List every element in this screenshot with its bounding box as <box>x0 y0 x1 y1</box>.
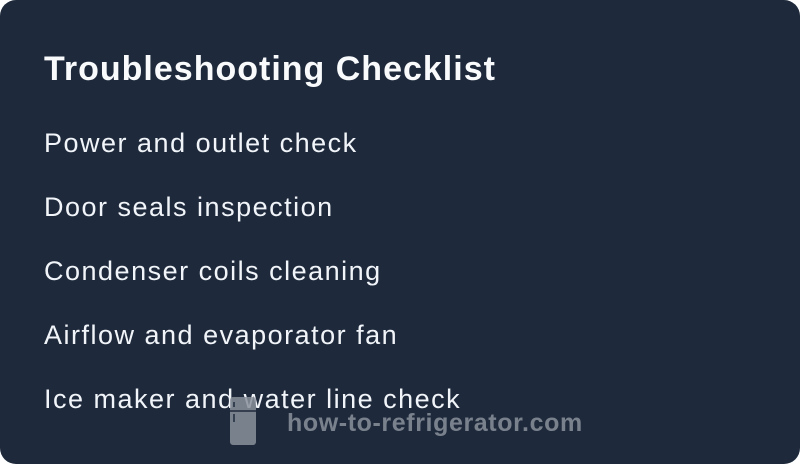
item: power: Power and outlet check <box>44 128 358 158</box>
item: condenser: Condenser coils cleaning <box>44 256 382 286</box>
title: Troubleshooting Checklist <box>44 50 496 88</box>
item: door seals: Door seals inspection <box>44 192 334 222</box>
item: ice maker: Ice maker and water line check <box>44 384 461 414</box>
item: airflow: Airflow and evaporator fan <box>44 320 398 350</box>
watermark: how-to-refrigerator.com <box>287 409 583 437</box>
icon: fridge <box>230 397 256 445</box>
